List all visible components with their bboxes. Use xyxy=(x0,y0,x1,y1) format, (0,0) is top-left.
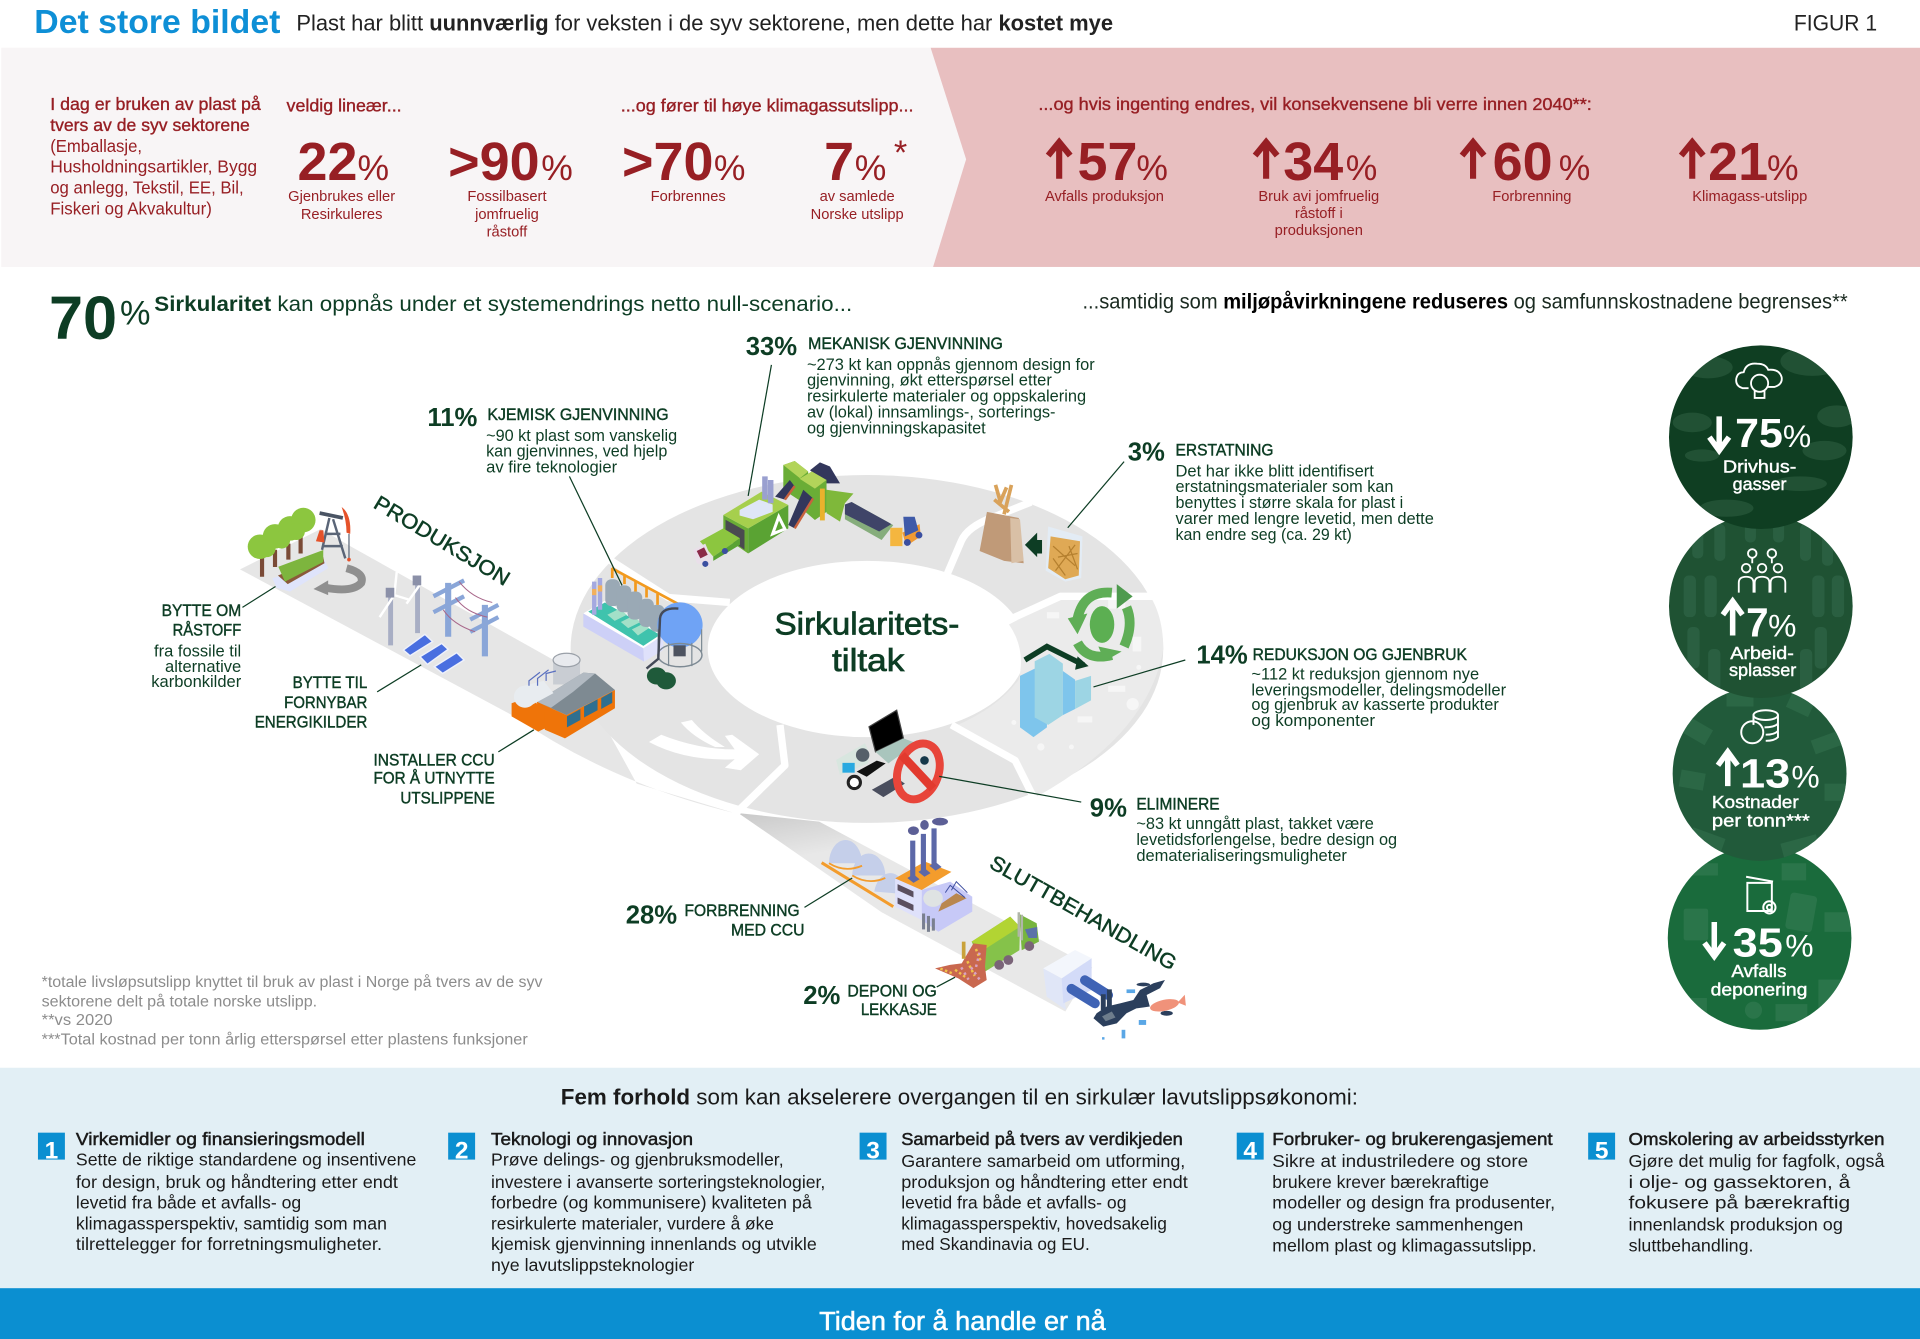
stat: >90% xyxy=(448,132,573,240)
circle: jobs: % xyxy=(1768,608,1796,644)
subtitle: Plast har blitt uunnværlig for veksten i de syv sektorene, men dette har kostet mye xyxy=(296,11,1113,36)
condition 3 xyxy=(860,1129,1188,1254)
condition 5: innenlandsk produksjon og xyxy=(1629,1215,1843,1235)
intro text: tvers av de syv sektorene xyxy=(50,115,250,135)
icon: circular arrow xyxy=(313,568,362,595)
circle: cost per ton xyxy=(1673,687,1854,861)
icon: black arrow xyxy=(1025,533,1042,557)
callout: reduksjon og gjenbruk: 14% xyxy=(1196,642,1248,670)
callout: eliminere xyxy=(1090,794,1397,865)
callout: eliminere: 9% xyxy=(1090,795,1127,823)
callout: deponi og lekkasje: DEPONI OG xyxy=(847,982,937,1001)
callout: kjemisk gjenvinning: ~90 kt plast som vanskelig xyxy=(486,426,677,445)
stat: up 34% xyxy=(1255,132,1379,239)
callout: installer CCU xyxy=(373,750,495,807)
circle: jobs: splasser xyxy=(1729,660,1796,680)
condition 2: resirkulerte materialer, vurdere å øke xyxy=(491,1213,774,1233)
condition 5: Omskolering av arbeidsstyrken xyxy=(1629,1129,1884,1149)
callout: reduksjon og gjenbruk: leveringsmodeller, delingsmodeller xyxy=(1251,681,1507,700)
stat: up 60% xyxy=(1462,132,1590,205)
callout: forbrenning med CCU: FORBRENNING xyxy=(684,901,800,920)
condition 2 xyxy=(448,1129,825,1275)
icon: chemical recycling plant xyxy=(583,568,703,689)
title: Det store bildet xyxy=(34,4,280,41)
center label: tiltak xyxy=(832,643,905,678)
condition 2: Prøve delings- og gjenbruksmodeller, xyxy=(491,1150,784,1170)
callout: bytte om råstoff: RÅSTOFF xyxy=(173,621,241,640)
callout: installer CCU: FOR Å UTNYTTE xyxy=(373,769,495,788)
condition 4: brukere krever bærekraftige xyxy=(1272,1172,1489,1192)
condition 2: nye lavutslippsteknologier xyxy=(491,1255,694,1275)
callout: bytte om råstoff xyxy=(151,601,242,691)
center label xyxy=(774,606,959,678)
panel: five conditions xyxy=(0,1068,1920,1288)
footer bar: Tiden for å handle er nå xyxy=(819,1308,1106,1336)
stat: >90%: % xyxy=(541,148,573,188)
road label: SLUTTBEHANDLING: SLUTTBEHANDLING xyxy=(986,851,1180,975)
stat: up 57%: Avfalls produksjon xyxy=(1045,189,1164,205)
intro text: I dag er bruken av plast på xyxy=(50,94,261,114)
callout: mekanisk gjenvinning: 33% xyxy=(746,333,797,361)
callout: mekanisk gjenvinning: MEKANISK GJENVINNING xyxy=(808,334,1003,353)
condition 1: tilrettelegger for forretningsmuligheter. xyxy=(76,1234,382,1254)
icon: coins xyxy=(1741,710,1778,743)
condition 4: 4 xyxy=(1243,1137,1257,1164)
condition 3: Samarbeid på tvers av verdikjeden xyxy=(901,1129,1183,1149)
stat: 22% xyxy=(288,132,395,223)
condition 1 xyxy=(38,1129,416,1254)
road label: PRODUKSJON: PRODUKSJON xyxy=(370,492,514,591)
condition 3: produksjon og håndtering etter endt xyxy=(901,1172,1188,1192)
ring xyxy=(571,475,1163,823)
condition 2: investere i avanserte sorteringsteknologier, xyxy=(491,1172,825,1192)
callout: erstatning: kan endre seg (ca. 29 kt) xyxy=(1176,525,1352,544)
intro text xyxy=(50,94,261,218)
circle: cost per ton: % xyxy=(1791,758,1820,794)
condition 5 xyxy=(1588,1129,1885,1255)
callout: erstatning: Det har ikke blitt identifisert xyxy=(1176,461,1374,480)
end-of-life road xyxy=(738,813,1092,1011)
circle: cost per ton: Kostnader xyxy=(1712,792,1799,812)
callout: erstatning xyxy=(1128,438,1434,544)
condition 4: mellom plast og klimagassutslipp. xyxy=(1272,1235,1537,1255)
stat: >90%: jomfruelig xyxy=(474,207,539,223)
circle: greenhouse gases: Drivhus- xyxy=(1723,457,1796,477)
callout: eliminere: dematerialiseringsmuligheter xyxy=(1136,846,1347,865)
stat: up 60%: % xyxy=(1559,148,1590,188)
stat: 7%: 7 xyxy=(824,132,854,192)
icon: mechanical recycling facility xyxy=(693,461,922,567)
subheading: worse by 2040: ...og hvis ingenting endres, vil konsekvensene bli verre innen 2040**: xyxy=(1038,94,1592,114)
callout: bytte om råstoff: alternative xyxy=(165,657,241,676)
condition 5: i olje- og gassektoren, å xyxy=(1629,1172,1850,1192)
icon: incineration plant with CCU xyxy=(822,818,972,932)
stat: >70%: >70 xyxy=(622,132,713,192)
callout: erstatning: erstatningsmaterialer som kan xyxy=(1176,477,1393,496)
stat: 22%: Gjenbrukes eller xyxy=(288,189,395,205)
condition 4 xyxy=(1237,1129,1555,1255)
stat: up 21%: 21 xyxy=(1708,132,1768,192)
icon: trees, oil pump and crops xyxy=(248,507,362,595)
subheading: linear: veldig lineær... xyxy=(287,95,402,115)
callout: deponi og lekkasje xyxy=(803,982,937,1019)
circle: waste to landfill: % xyxy=(1785,927,1814,963)
callout: reduksjon og gjenbruk: ~112 kt reduksjon gjennom nye xyxy=(1251,665,1479,684)
callout: mekanisk gjenvinning: ~273 kt kan oppnås gjennom design for xyxy=(807,355,1095,374)
stat: >70% xyxy=(622,132,745,205)
subheading: emissions: ...og fører til høye klimagassutslipp... xyxy=(621,95,913,115)
circle: greenhouse gases xyxy=(1669,345,1856,529)
stat: up 34%: % xyxy=(1346,148,1377,188)
callout: kjemisk gjenvinning: av fire teknologier xyxy=(486,458,618,477)
condition 4: Sikre at industriledere og store xyxy=(1272,1151,1528,1171)
icon: trash bin xyxy=(1746,877,1776,913)
ring gaps xyxy=(607,502,1157,816)
footnotes: *totale livsløpsutslipp knyttet til bruk av plast i Norge på tvers av de syv xyxy=(42,973,542,991)
condition 1: Virkemidler og finansieringsmodell xyxy=(76,1129,365,1149)
callout: kjemisk gjenvinning: kan gjenvinnes, ved hjelp xyxy=(486,442,667,461)
callout: reduksjon og gjenbruk: og komponenter xyxy=(1251,711,1376,730)
condition 3: levetid fra både et avfalls- og xyxy=(901,1193,1127,1213)
circular diagram xyxy=(240,475,1163,1011)
circle: greenhouse gases: % xyxy=(1783,418,1811,454)
stat: 7%: av samlede xyxy=(820,189,895,205)
stat: >90%: råstoff xyxy=(487,224,528,240)
condition 5: fokusere på bærekraftig xyxy=(1629,1193,1850,1213)
icon: eliminate electronics with prohibition sign xyxy=(836,710,947,805)
condition 5: Gjøre det mulig for fagfolk, også xyxy=(1629,1151,1885,1171)
callout: kjemisk gjenvinning: 11% xyxy=(427,404,478,432)
speckled reduction segment xyxy=(955,598,1163,797)
stat: >70%: Forbrennes xyxy=(651,189,726,205)
callout: mekanisk gjenvinning: av (lokal) innsamlings-, sorterings- xyxy=(807,403,1056,422)
intro text: Husholdningsartikler, Bygg xyxy=(50,157,257,177)
callout: reduksjon og gjenbruk: og gjenbruk av kasserte produkter xyxy=(1251,695,1499,714)
stat: up 34%: produksjonen xyxy=(1275,223,1363,239)
condition 3: Garantere samarbeid om utforming, xyxy=(901,1151,1185,1171)
callout: installer CCU: INSTALLER CCU xyxy=(373,750,495,769)
condition 3: med Skandinavia og EU. xyxy=(901,1234,1090,1254)
panel: today's plastic use xyxy=(1,48,1920,267)
callout: forbrenning med CCU xyxy=(626,901,804,940)
callout: erstatning: varer med lengre levetid, men dette xyxy=(1176,509,1434,528)
icon: outlet pipes and polluted water xyxy=(1043,950,1187,1040)
stat: up 57%: 57 xyxy=(1078,132,1137,192)
stat: up 34%: 34 xyxy=(1283,132,1343,192)
callout: bytte om råstoff: BYTTE OM xyxy=(162,601,241,620)
circle: cost per ton: per tonn*** xyxy=(1712,811,1810,831)
callout: installer CCU: UTSLIPPENE xyxy=(400,788,495,807)
callout: mekanisk gjenvinning: gjenvinning, økt etterspørsel etter xyxy=(807,371,1052,390)
callout: reduksjon og gjenbruk: REDUKSJON OG GJENBRUK xyxy=(1253,645,1467,664)
stat: up 60%: 60 xyxy=(1493,132,1553,192)
footnotes xyxy=(42,973,542,1048)
circle: jobs xyxy=(1669,514,1853,698)
stat: 7%: * xyxy=(894,134,907,172)
condition 4: modeller og design fra produsenter, xyxy=(1272,1193,1555,1213)
callout: deponi og lekkasje: LEKKASJE xyxy=(861,1000,937,1019)
callout: fornybar energi: ENERGIKILDER xyxy=(255,712,367,731)
footnotes: **vs 2020 xyxy=(42,1012,113,1029)
intro text: Fiskeri og Akvakultur) xyxy=(50,198,212,218)
callout: mekanisk gjenvinning: og gjenvinningskapasitet xyxy=(807,418,986,437)
circle: jobs: Arbeid- xyxy=(1730,643,1794,663)
stat: 7%: % xyxy=(855,148,886,188)
callout: fornybar energi: BYTTE TIL xyxy=(293,673,367,692)
circle: greenhouse gases: gasser xyxy=(1733,474,1787,494)
callout: eliminere: levetidsforlengelse, bedre design og xyxy=(1136,830,1397,849)
stat: up 57%: % xyxy=(1136,148,1168,188)
condition 1: 1 xyxy=(45,1137,58,1164)
circle: greenhouse gases: 75 xyxy=(1735,410,1783,456)
condition 1: klimagassperspektiv, samtidig som man xyxy=(76,1213,387,1233)
condition 4: Forbruker- og brukerengasjement xyxy=(1272,1129,1553,1149)
callout: bytte om råstoff: karbonkilder xyxy=(151,672,242,691)
heading: 70% circularity: 70 xyxy=(49,284,117,352)
heading: Fem forhold som kan akselerere overgangen til en sirkulær lavutslippsøkonomi: xyxy=(561,1084,1358,1109)
heading: 70% circularity: Sirkularitet kan oppnås under et systemendrings netto null-scenario... xyxy=(154,292,852,316)
center label: Sirkularitets- xyxy=(774,606,959,641)
icon: garbage truck dumping waste xyxy=(935,912,1039,988)
footer bar xyxy=(0,1288,1920,1339)
icon: CCU factory xyxy=(512,653,615,738)
callout: erstatning: ERSTATNING xyxy=(1176,441,1273,460)
building xyxy=(723,476,788,553)
intro text: og anlegg, Tekstil, EE, Bil, xyxy=(50,177,244,197)
callout: bytte om råstoff: fra fossile til xyxy=(154,641,241,660)
icon: paper bag and straw bag xyxy=(980,485,1082,582)
stat: 22%: Resirkuleres xyxy=(301,207,382,223)
stat: up 21%: Klimagass-utslipp xyxy=(1692,189,1807,205)
stat: 7% xyxy=(811,132,907,223)
circle: waste to landfill: 35 xyxy=(1733,919,1783,965)
condition 1: Sette de riktige standardene og insentivene xyxy=(76,1150,416,1170)
callout: eliminere: ELIMINERE xyxy=(1136,794,1220,813)
circle: waste to landfill: Avfalls xyxy=(1731,961,1787,981)
callout: mekanisk gjenvinning xyxy=(746,333,1095,437)
condition 3: 3 xyxy=(866,1137,880,1164)
circle: cost per ton: 13 xyxy=(1740,750,1790,796)
icon: people network xyxy=(1739,549,1785,593)
callout: erstatning: 3% xyxy=(1128,438,1165,466)
circle: jobs: 7 xyxy=(1746,600,1769,646)
stat: >90%: Fossilbasert xyxy=(467,189,547,205)
production road xyxy=(240,529,735,813)
white flow arrow xyxy=(649,720,759,770)
condition 4: og understreke sammenhengen xyxy=(1272,1215,1523,1235)
callout: forbrenning med CCU: 28% xyxy=(626,901,677,929)
callout: deponi og lekkasje: 2% xyxy=(803,982,841,1010)
condition 1: for design, bruk og håndtering etter endt xyxy=(76,1172,398,1192)
leader lines xyxy=(242,365,1185,987)
intro text: (Emballasje, xyxy=(50,136,142,156)
condition 5: sluttbehandling. xyxy=(1629,1235,1753,1255)
stat: 22%: 22 xyxy=(298,132,357,192)
condition 5: 5 xyxy=(1595,1137,1608,1164)
condition 2: forbedre (og kommunisere) kvaliteten på xyxy=(491,1193,812,1213)
callout: reduksjon og gjenbruk xyxy=(1196,642,1507,730)
condition 1: levetid fra både et avfalls- og xyxy=(76,1193,301,1213)
callout: erstatning: benyttes i større skala for plast i xyxy=(1176,493,1403,512)
circle: waste to landfill xyxy=(1668,846,1851,1030)
callout: fornybar energi: FORNYBAR xyxy=(284,693,367,712)
circle: waste to landfill: deponering xyxy=(1711,980,1807,1000)
stat: >90%: >90 xyxy=(448,132,540,192)
callout: forbrenning med CCU: MED CCU xyxy=(731,921,804,940)
stat: up 21%: % xyxy=(1767,148,1799,188)
stat: up 21% xyxy=(1681,132,1807,205)
condition 3: klimagassperspektiv, hovedsakelig xyxy=(901,1213,1167,1233)
icon: cloud with skull xyxy=(1736,364,1782,398)
condition 2: 2 xyxy=(455,1137,468,1164)
panel: current state chevron xyxy=(1,48,966,267)
callout: fornybar energi xyxy=(255,673,367,731)
stat: up 34%: råstoff i xyxy=(1295,206,1343,222)
figure label: FIGUR 1 xyxy=(1794,11,1877,36)
callout: eliminere: ~83 kt unngått plast, takket være xyxy=(1136,814,1374,833)
stat: up 60%: Forbrenning xyxy=(1492,189,1571,205)
footnotes: ***Total kostnad per tonn årlig etterspørsel etter plastens funksjoner xyxy=(42,1030,528,1048)
stat: 7%: Norske utslipp xyxy=(811,207,904,223)
icon: wind turbines, pylons and solar panels xyxy=(380,558,498,673)
footnotes: sektorene delt på totale norske utslipp. xyxy=(42,993,317,1011)
callout: kjemisk gjenvinning: KJEMISK GJENVINNING xyxy=(487,405,669,424)
condition 2: kjemisk gjenvinning innenlands og utvikle xyxy=(491,1234,817,1254)
icon: recycling arrows and blue bars xyxy=(1020,584,1133,737)
stat: up 57% xyxy=(1045,132,1168,205)
stat: >70%: % xyxy=(714,148,745,188)
stat: 22%: % xyxy=(358,148,389,188)
callout: mekanisk gjenvinning: resirkulerte materialer og oppskalering xyxy=(807,387,1086,406)
callout: kjemisk gjenvinning xyxy=(427,404,677,477)
heading: reduced impacts: ...samtidig som miljøpåvirkningene reduseres og samfunnskostnadene begrenses** xyxy=(1082,290,1848,314)
heading: 70% circularity xyxy=(49,284,852,352)
condition 2: Teknologi og innovasjon xyxy=(491,1129,693,1149)
heading: 70% circularity: % xyxy=(120,295,150,333)
stat: up 34%: Bruk avi jomfruelig xyxy=(1258,189,1379,205)
